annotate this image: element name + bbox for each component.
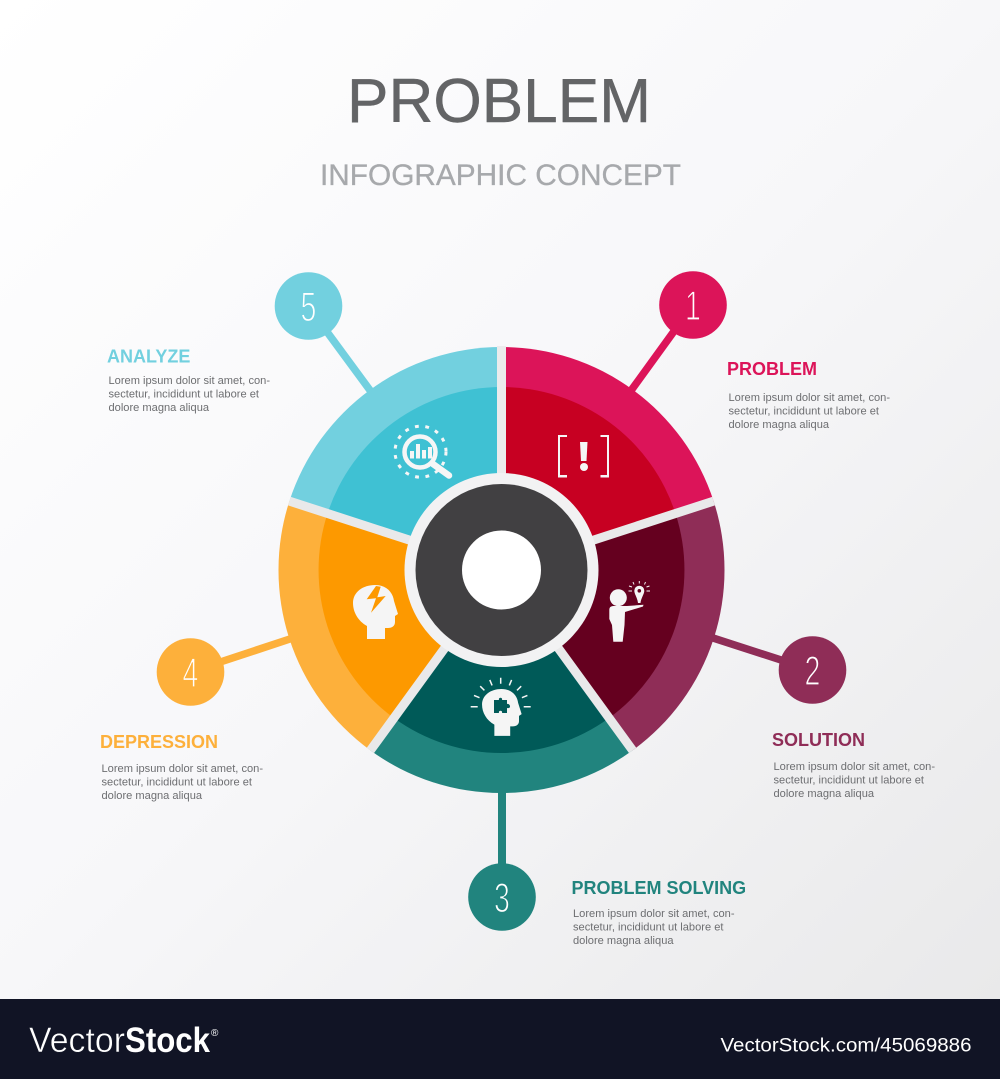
badge 1 <box>659 271 727 339</box>
text block: depression <box>100 732 263 802</box>
connector: step 2 <box>710 637 812 670</box>
text block: solution: dolore magna aliqua <box>774 788 875 800</box>
text block: solution: sectetur, incididunt ut labore et <box>774 774 924 786</box>
footer logo: ® <box>211 1028 219 1039</box>
text block: analyze: dolore magna aliqua <box>108 402 210 414</box>
title: PROBLEM <box>347 67 651 136</box>
text block: solution <box>772 730 935 800</box>
text block: depression: sectetur, incididunt ut labore et <box>102 776 252 788</box>
badge 2: 2 <box>805 646 820 694</box>
connector: step 4 <box>190 638 293 672</box>
badge 2 <box>779 636 846 704</box>
text block: problem solving <box>572 878 746 947</box>
footer logo: Vector <box>29 1021 125 1060</box>
badge 5 <box>275 272 342 340</box>
text block: analyze: ANALYZE <box>107 346 190 366</box>
segment 1: problem <box>502 347 714 570</box>
badge 4: 4 <box>183 648 198 696</box>
icon: head with lightning bolt <box>353 585 398 639</box>
badge 3: 3 <box>494 873 510 921</box>
text block: analyze: Lorem ipsum dolor sit amet, con- <box>108 375 270 387</box>
text block: depression: Lorem ipsum dolor sit amet, con- <box>102 763 263 775</box>
segment 5: analyze <box>289 347 502 570</box>
text block: problem: PROBLEM <box>727 359 817 379</box>
text block: problem solving: sectetur, incididunt ut labore et <box>573 922 723 934</box>
footer bar <box>0 999 1000 1079</box>
text block: depression: DEPRESSION <box>100 732 218 752</box>
footer image id: VectorStock.com/45069886 <box>720 1034 972 1056</box>
segment 2: solution <box>502 501 725 750</box>
text block: problem: sectetur, incididunt ut labore et <box>728 406 879 418</box>
text block: analyze: sectetur, incididunt ut labore et <box>108 388 259 400</box>
footer logo <box>29 1021 219 1060</box>
badge 4 <box>157 638 224 706</box>
text block: problem <box>727 359 890 431</box>
text block: problem solving: Lorem ipsum dolor sit amet, con- <box>573 908 735 920</box>
text block: solution: SOLUTION <box>772 730 865 750</box>
connector: step 3 <box>498 785 506 897</box>
text block: solution: Lorem ipsum dolor sit amet, con- <box>774 761 935 773</box>
icon: person with light bulb <box>609 581 650 642</box>
connector: step 1 <box>630 305 693 392</box>
footer logo: Stock <box>125 1021 210 1060</box>
badge 3 <box>468 863 536 931</box>
segment 4: depression <box>278 501 502 750</box>
text block: analyze <box>107 346 270 414</box>
connector: step 5 <box>308 306 372 393</box>
icon: magnifier with chart <box>395 426 449 477</box>
icon: exclamation in brackets <box>558 435 609 478</box>
badge 1: 1 <box>685 281 701 329</box>
center hub <box>404 473 598 667</box>
subtitle: INFOGRAPHIC CONCEPT <box>320 159 681 192</box>
text block: problem: dolore magna aliqua <box>728 419 830 431</box>
donut chart <box>278 346 725 793</box>
icon: head with puzzle piece <box>471 678 531 736</box>
text block: problem solving: PROBLEM SOLVING <box>572 878 746 898</box>
badge 5: 5 <box>301 282 316 330</box>
text block: depression: dolore magna aliqua <box>102 790 203 802</box>
text block: problem solving: dolore magna aliqua <box>573 935 674 947</box>
segment 3: problem solving <box>370 570 633 793</box>
text block: problem: Lorem ipsum dolor sit amet, con- <box>728 392 890 404</box>
